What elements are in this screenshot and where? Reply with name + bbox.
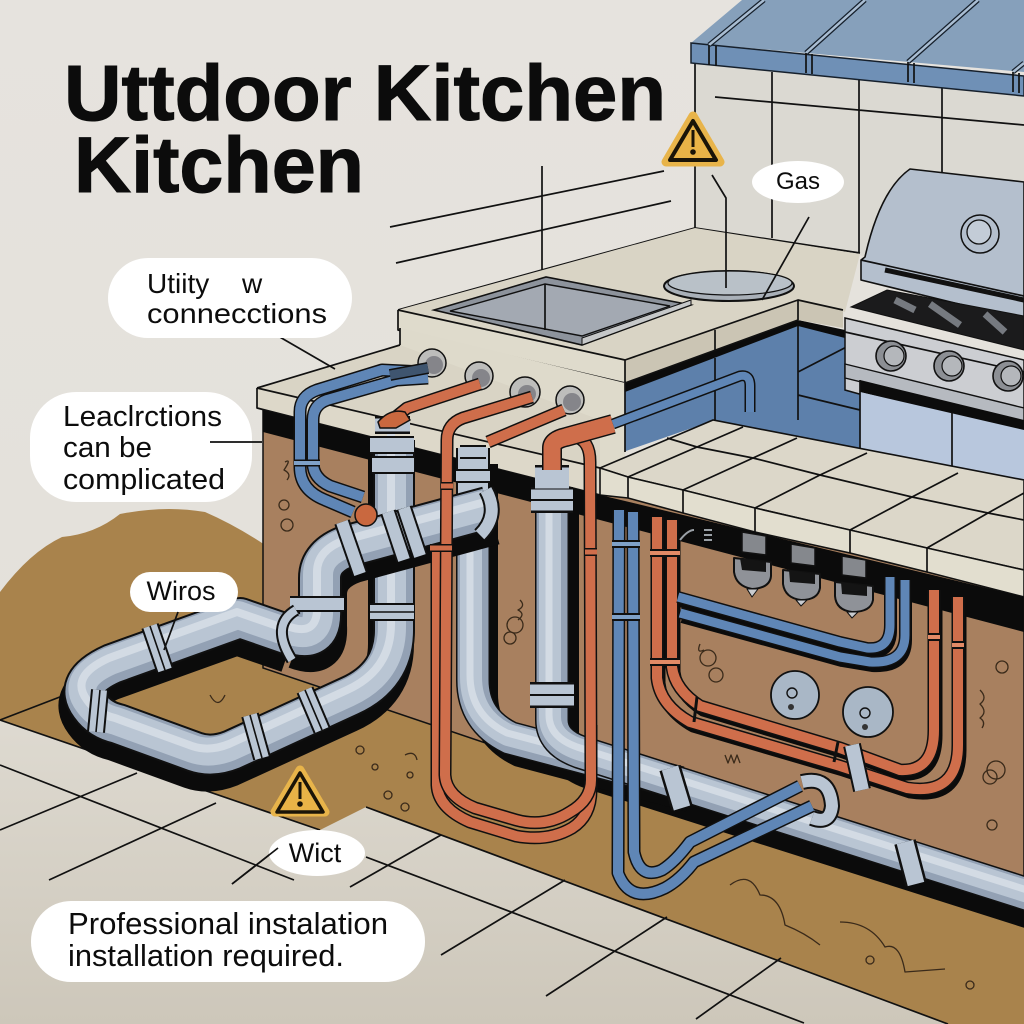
right orange gas lines (650, 517, 964, 794)
callout: leak connections: Leaclrctions (63, 401, 222, 433)
wict callout leader (232, 848, 278, 884)
round wall gauges (771, 671, 893, 737)
elbow drain pipe (282, 490, 494, 660)
callout: wiros: Wiros (146, 576, 216, 606)
shutoff valves (680, 530, 873, 618)
callout: wiros (130, 572, 238, 612)
panel: grill (845, 169, 1024, 490)
blue water lines upper left (294, 368, 428, 526)
grill knobs (876, 341, 1023, 391)
title: Kitchen (74, 120, 364, 209)
soil texture marks (210, 461, 1008, 989)
panel: upper countertop with sink (398, 228, 860, 383)
callout: professional installation (31, 901, 425, 982)
paving floor (0, 700, 1024, 1024)
wall port fittings (418, 349, 584, 414)
pipe collars (530, 478, 916, 884)
callout: gas (752, 161, 844, 203)
callout: utility connections: connecctions (147, 298, 327, 329)
main drain pipe (470, 445, 1024, 915)
callout lines (278, 175, 809, 369)
callout: professional installation: installation required. (68, 938, 344, 973)
sink (434, 277, 691, 345)
panel: lower counter block face with ports (400, 328, 625, 470)
callout: professional installation: Professional instalation (68, 906, 388, 941)
leak callout leader (210, 441, 262, 443)
wiros callout leader (164, 612, 178, 650)
callout: utility connections (108, 258, 352, 338)
callout: leak connections: complicated (63, 464, 225, 496)
callout: leak connections: can be (63, 432, 152, 464)
pipe collars (282, 490, 492, 660)
callout: wict: Wict (289, 838, 342, 868)
callout: utility connections: w (241, 268, 263, 299)
callout: leak connections (30, 392, 252, 502)
orange gas lines (378, 384, 613, 838)
blue line to cabinet (613, 376, 750, 424)
title (64, 48, 666, 209)
callout: gas: Gas (776, 168, 820, 195)
panel: tiled back wall (695, 60, 1024, 330)
vertical blue lines (612, 510, 862, 894)
panel: blue cabinet (623, 320, 860, 452)
panel: blue roof canopy (691, 0, 1024, 96)
title: Uttdoor Kitchen (64, 48, 666, 137)
left loop drain pipe (81, 425, 414, 769)
right upper blue lines (678, 577, 907, 667)
wall background lines (390, 166, 695, 310)
center column pipe top (456, 448, 490, 500)
icon: lower warning triangle (275, 770, 325, 812)
exposed ground soil (0, 509, 1024, 1024)
round lid (664, 271, 794, 301)
icon: upper warning triangle (666, 116, 720, 162)
panel: lower tiled countertop (257, 345, 1024, 632)
callout: wict (269, 830, 365, 876)
pipe collars (96, 425, 414, 758)
panel: soil wall below counter (263, 408, 1024, 925)
callout: utility connections: Utiity (147, 268, 209, 299)
pavement joint lines (0, 695, 948, 1024)
